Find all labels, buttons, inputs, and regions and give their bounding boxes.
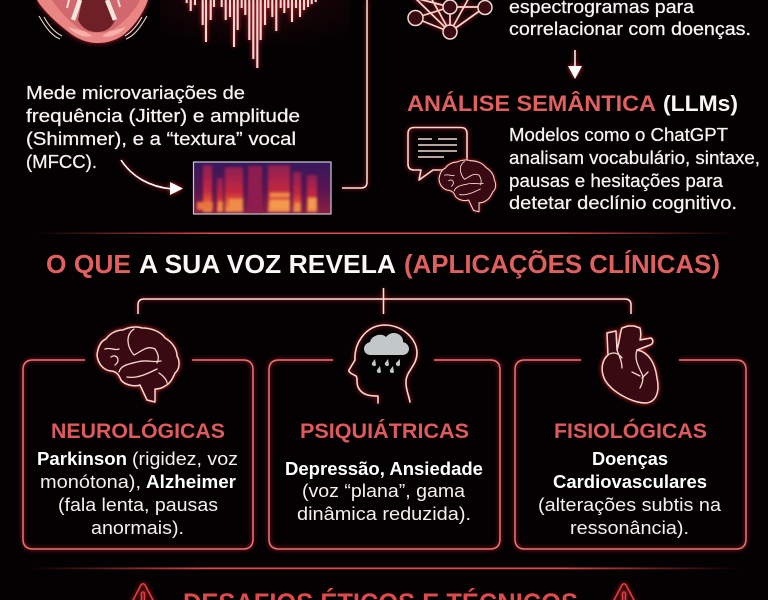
heading: clinical applications: (APLICAÇÕES CLÍNICAS) bbox=[404, 249, 720, 279]
heading: semantic analysis: (LLMs) bbox=[663, 91, 738, 116]
card text bbox=[37, 449, 238, 538]
text: acoustic analysis description bbox=[26, 83, 300, 172]
icon: warning right bbox=[612, 584, 636, 600]
heading: clinical applications: O QUE bbox=[46, 251, 131, 279]
card text: anormais). bbox=[91, 518, 184, 538]
text: semantic analysis description: detetar declínio cognitivo. bbox=[509, 193, 737, 213]
card title: PSIQUIÁTRICAS bbox=[300, 420, 469, 443]
card text: Parkinson bbox=[37, 449, 127, 469]
icon: neural network bbox=[408, 0, 492, 39]
waveform bbox=[187, 0, 316, 68]
bracket connector bbox=[138, 288, 631, 314]
card title: NEUROLÓGICAS bbox=[51, 419, 225, 443]
connector line from spectrogram up to neural net bbox=[342, 0, 367, 188]
icon: head with rain cloud bbox=[349, 325, 417, 403]
card text: Alzheimer bbox=[146, 472, 236, 492]
card text bbox=[285, 459, 483, 524]
panel: neurological bbox=[23, 327, 253, 549]
icon: brain bbox=[97, 327, 179, 402]
text: acoustic analysis description: (MFCC). bbox=[26, 152, 97, 172]
card text: (voz “plana”, gama bbox=[302, 481, 466, 501]
card text: ressonância). bbox=[570, 518, 689, 538]
text: acoustic analysis description: (Shimmer), e a “textura” vocal bbox=[26, 129, 296, 149]
card text: Doenças bbox=[592, 449, 668, 469]
panel: psychiatric bbox=[269, 325, 500, 549]
card text: (alterações subtis na bbox=[538, 495, 722, 515]
card title: FISIOLÓGICAS bbox=[554, 419, 707, 443]
text: neural network description: correlacionar com doenças. bbox=[509, 19, 751, 39]
waveform haze bbox=[160, 0, 350, 70]
icon: larynx illustration bbox=[37, 0, 148, 43]
card text: Depressão, Ansiedade bbox=[285, 459, 483, 479]
panel: physiological bbox=[515, 326, 746, 549]
card text: dinâmica reduzida). bbox=[297, 504, 471, 524]
text: semantic analysis description: Modelos como o ChatGPT bbox=[509, 125, 728, 145]
card text bbox=[538, 449, 722, 538]
text: semantic analysis description: pausas e hesitações para bbox=[509, 171, 724, 191]
heading: semantic analysis: ANÁLISE SEMÂNTICA bbox=[407, 91, 656, 116]
card text: (rigidez, voz bbox=[132, 449, 238, 469]
card text: monótona), bbox=[40, 472, 141, 492]
icon: chat bubble and brain bbox=[408, 128, 496, 212]
card text: (fala lenta, pausas bbox=[58, 495, 218, 515]
text: acoustic analysis description: frequência (Jitter) e amplitude bbox=[26, 106, 300, 126]
spectrogram bbox=[194, 162, 331, 214]
heading: clinical applications: A SUA VOZ REVELA bbox=[139, 251, 396, 279]
arrow: down bbox=[568, 50, 582, 79]
icon: warning left bbox=[131, 584, 155, 600]
icon: heart bbox=[602, 326, 658, 403]
text: semantic analysis description bbox=[509, 125, 760, 213]
heading: clinical applications bbox=[46, 249, 720, 279]
card text: Cardiovasculares bbox=[553, 472, 707, 492]
text: neural network description bbox=[509, 0, 751, 39]
text: acoustic analysis description: Mede microvariações de bbox=[26, 83, 245, 103]
arrow: text to spectrogram bbox=[121, 160, 183, 195]
text: semantic analysis description: analisam vocabulário, sintaxe, bbox=[509, 148, 760, 168]
